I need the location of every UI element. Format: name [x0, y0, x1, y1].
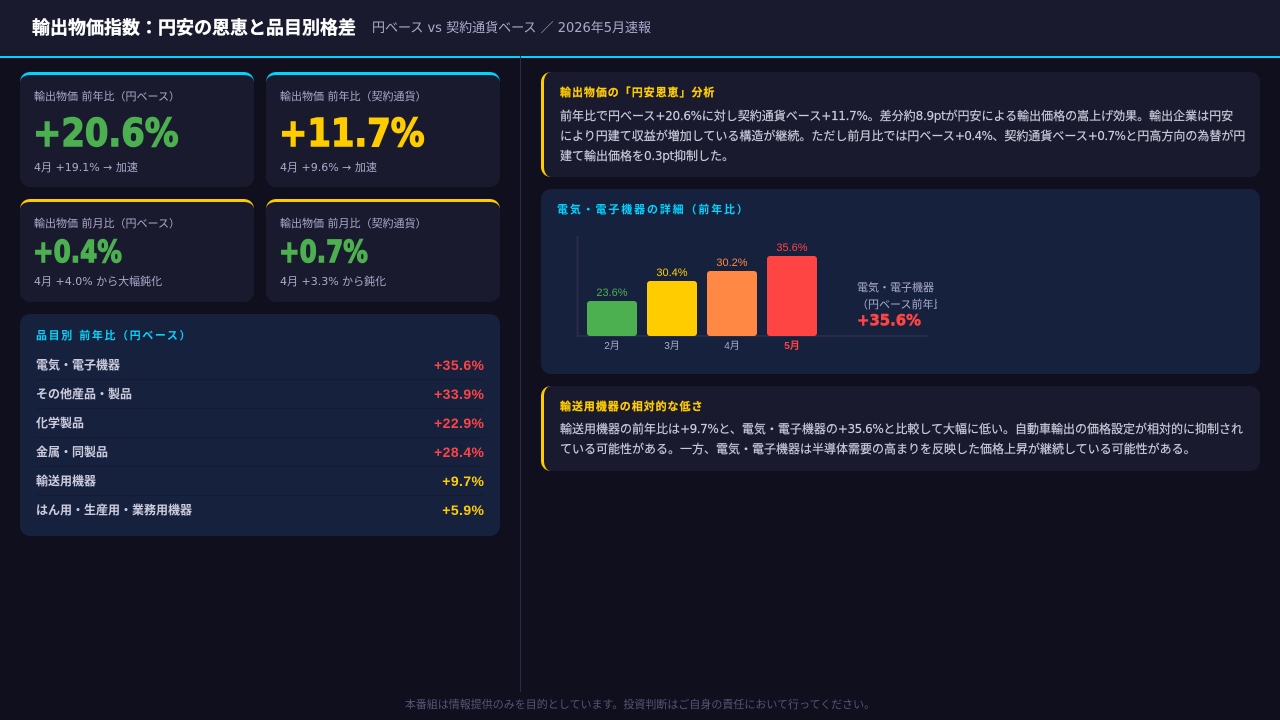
bar chart: [576, 236, 937, 352]
KPI card: 前年比 契約通貨: 輸出物価 前年比（契約通貨）: [280, 90, 426, 103]
row: 電気・電子機器: [36, 351, 484, 380]
KPI card: 前月比 円ベース: 4月 +4.0% から大幅鈍化: [34, 275, 162, 288]
row: 輸送用機器: [36, 467, 484, 496]
row: 化学製品: [36, 409, 484, 438]
panel: 電気・電子機器 chart: [541, 189, 1260, 374]
bar: 3月: 3月: [664, 340, 680, 352]
column divider: [520, 56, 521, 692]
KPI card: 前月比 契約通貨: 4月 +3.3% から鈍化: [280, 275, 386, 288]
footer disclaimer: 本番組は情報提供のみを目的としています。投資判断はご自身の責任において行ってください。: [405, 698, 875, 711]
note body: ている可能性がある。一方、電気・電子機器は半導体需要の高まりを反映した価格上昇が継続している可能性がある。: [560, 442, 1196, 456]
row: 電気・電子機器: +35.6%: [434, 357, 484, 373]
KPI card: 前年比 円ベース: 輸出物価 前年比（円ベース）: [34, 90, 180, 103]
panel: 品目別 table: [20, 314, 500, 536]
KPI card: 前月比 円ベース: 輸出物価 前月比（円ベース）: [34, 217, 180, 230]
row: その他産品・製品: +33.9%: [434, 386, 484, 402]
bar: 4月: 4月: [724, 340, 740, 352]
bar: 5月: 5月: [784, 340, 800, 352]
KPI card: 前月比 契約通貨: 輸出物価 前月比（契約通貨）: [280, 217, 426, 230]
row: はん用・生産用・業務用機器: はん用・生産用・業務用機器: [36, 503, 192, 517]
KPI card: 前年比 円ベース: 4月 +19.1% → 加速: [34, 161, 138, 174]
KPI card: 前年比 契約通貨: [266, 72, 500, 187]
note heading: 輸送用機器の相対的な低さ: [560, 400, 703, 413]
chart callout: 電気・電子機器: [857, 280, 934, 294]
row: 輸送用機器: +9.7%: [442, 473, 484, 489]
bar: 3月: 30.4%: [656, 267, 688, 279]
chart callout: +35.6%: [857, 310, 921, 330]
KPI card: 前年比 契約通貨: 4月 +9.6% → 加速: [280, 161, 377, 174]
title: 輸出物価指数：円安の恩恵と品目別格差: [32, 18, 356, 39]
note body: 輸送用機器の前年比は+9.7%と、電気・電子機器の+35.6%と比較して大幅に低い。自動車輸出の価格設定が相対的に抑制され: [560, 422, 1243, 436]
KPI card: 前月比 円ベース: [20, 199, 254, 302]
analysis body: [560, 109, 1245, 163]
row: 輸送用機器: 輸送用機器: [36, 474, 96, 488]
row: 金属・同製品: 金属・同製品: [36, 445, 108, 459]
panel: 円安恩恵 analysis: [541, 72, 1260, 177]
row: はん用・生産用・業務用機器: +5.9%: [442, 502, 484, 518]
chart callout: [857, 280, 955, 330]
note body: [560, 422, 1243, 456]
bar: 5月: 35.6%: [776, 242, 808, 254]
analysis body: 建て輸出価格を0.3pt抑制した。: [560, 149, 734, 163]
KPI card: 前月比 円ベース: +0.4%: [33, 235, 122, 270]
header bar: [0, 0, 1280, 58]
bar: 2月: 23.6%: [596, 287, 628, 299]
KPI card: 前年比 円ベース: [20, 72, 254, 187]
chart heading: 電気・電子機器の詳細（前年比）: [557, 203, 750, 216]
bar: 5月: [767, 242, 817, 352]
row: その他産品・製品: その他産品・製品: [36, 387, 132, 401]
table heading: 品目別 前年比（円ベース）: [36, 329, 192, 342]
KPI card: 前月比 契約通貨: +0.7%: [279, 235, 368, 270]
KPI card: 前月比 契約通貨: [266, 199, 500, 302]
bar: 2月: 2月: [604, 340, 620, 352]
row: 化学製品: 化学製品: [36, 416, 84, 430]
row: 金属・同製品: +28.4%: [434, 444, 484, 460]
KPI card: 前年比 円ベース: +20.6%: [33, 111, 179, 155]
KPI card: 前年比 契約通貨: +11.7%: [279, 111, 425, 155]
analysis body: により円建て収益が増加している構造が継続。ただし前月比では円ベース+0.4%、契約通貨ベース+0.7%と円高方向の為替が円: [560, 129, 1245, 143]
row: 電気・電子機器: 電気・電子機器: [36, 358, 120, 372]
panel: 輸送用機器 note: [541, 386, 1260, 471]
row: 化学製品: +22.9%: [434, 415, 484, 431]
bar: 2月: [587, 287, 637, 352]
subtitle: 円ベース vs 契約通貨ベース ／ 2026年5月速報: [372, 21, 651, 36]
row: 金属・同製品: [36, 438, 484, 467]
row: はん用・生産用・業務用機器: [36, 502, 484, 518]
bar: 4月: [707, 257, 757, 352]
bar: 4月: 30.2%: [716, 257, 748, 269]
analysis body: 前年比で円ベース+20.6%に対し契約通貨ベース+11.7%。差分約8.9ptが円安による輸出価格の嵩上げ効果。輸出企業は円安: [560, 109, 1233, 123]
bar: 3月: [647, 267, 697, 352]
analysis heading: 輸出物価の「円安恩恵」分析: [560, 86, 715, 99]
row: その他産品・製品: [36, 380, 484, 409]
